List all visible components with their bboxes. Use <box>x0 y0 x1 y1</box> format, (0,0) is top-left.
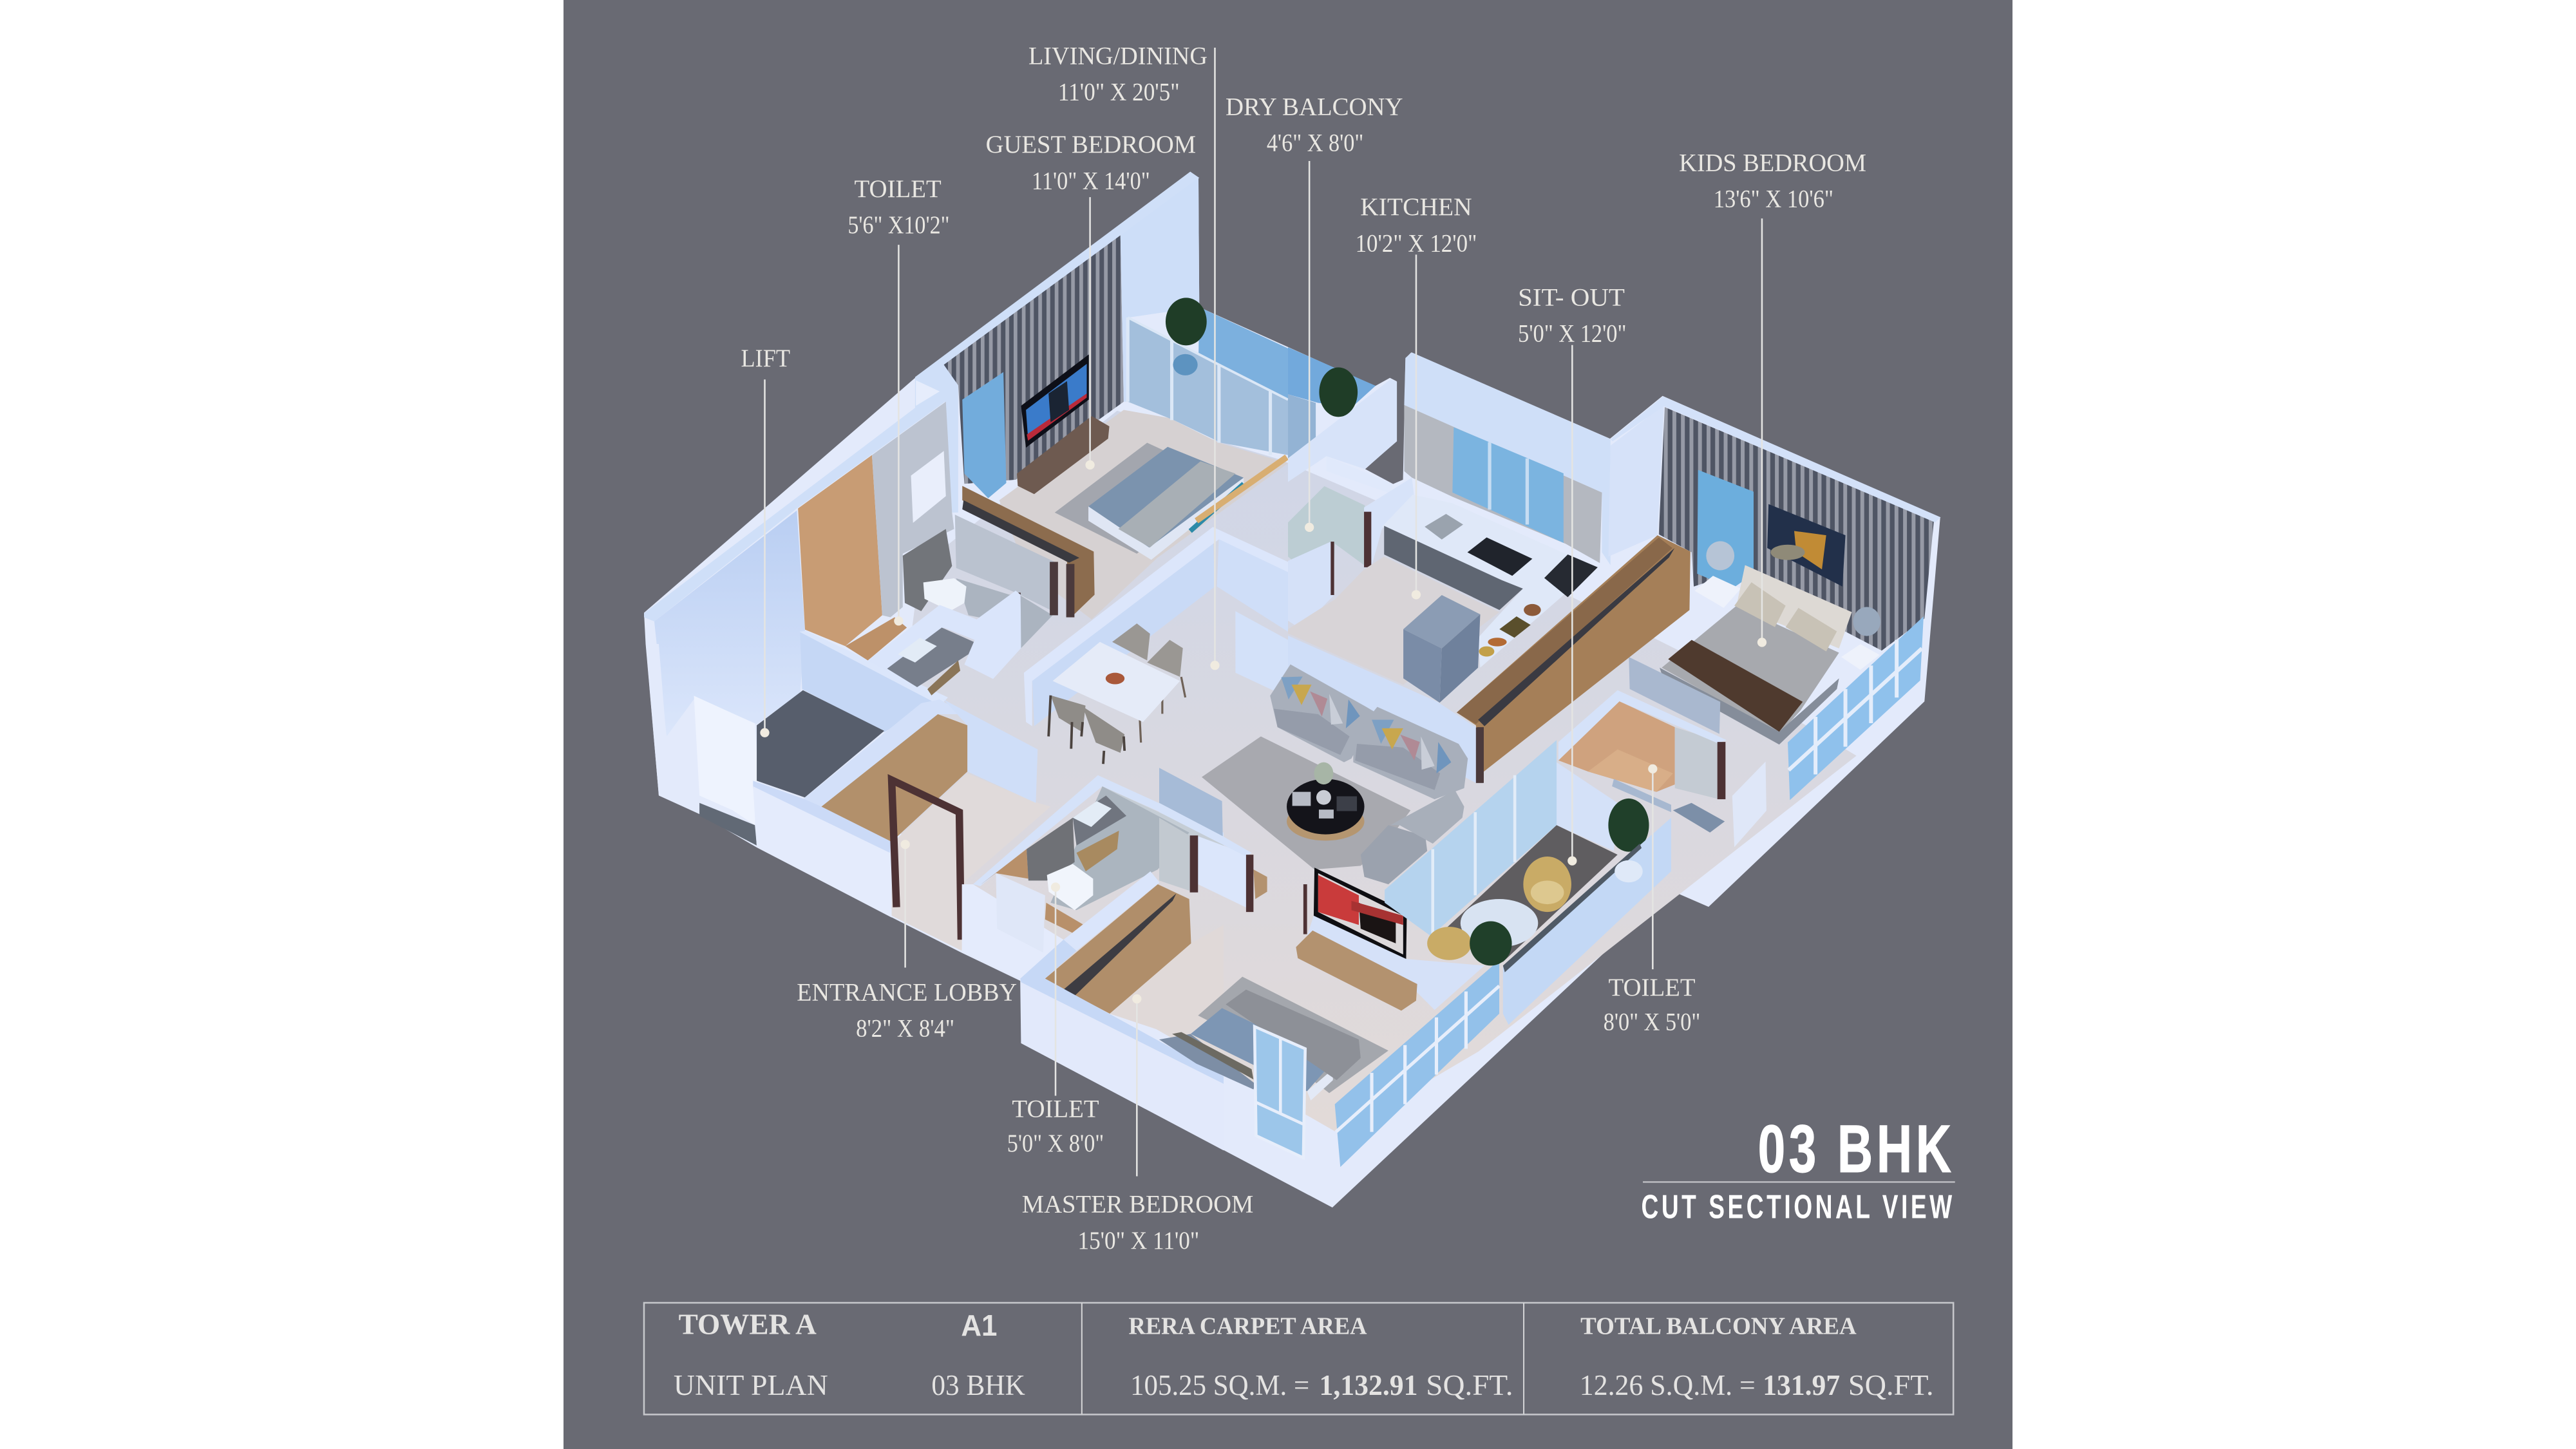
area table: TOTAL BALCONY AREA <box>1580 1312 1857 1340</box>
food on counter <box>1479 604 1541 656</box>
toilet floor <box>1050 786 1189 910</box>
master glazing <box>1335 960 1499 1167</box>
label: entrance lobby: 8'2" X 8'4" <box>856 1014 954 1043</box>
wood panel <box>822 714 967 842</box>
cabinets <box>1384 526 1523 610</box>
plant <box>1166 298 1207 375</box>
label: master bedroom: MASTER BEDROOM <box>1022 1190 1253 1218</box>
area table: 131.97 <box>1763 1368 1840 1401</box>
label: kitchen <box>1356 193 1477 600</box>
balcony blue <box>1288 347 1376 407</box>
master bench <box>1296 931 1417 1010</box>
area table: A1 <box>961 1309 997 1342</box>
guest wardrobe <box>962 486 1095 618</box>
sofa 1 <box>1270 665 1376 762</box>
marble wall <box>872 402 954 618</box>
posts <box>1190 835 1307 934</box>
upper-left rooms <box>644 172 1288 764</box>
wc <box>1047 864 1093 910</box>
kids stripe wall <box>1659 407 1934 650</box>
coffee table <box>1287 762 1365 840</box>
label: toilet <box>848 175 949 625</box>
master rug <box>1198 977 1388 1093</box>
label: master bedroom <box>1022 994 1253 1255</box>
master bed <box>1159 990 1361 1101</box>
notch face <box>916 381 940 406</box>
wood tall panel <box>798 455 882 646</box>
vanity <box>1073 795 1126 871</box>
nightstands and lamps <box>1694 541 1880 670</box>
lower-left rooms <box>646 644 1224 1150</box>
label: living dining: LIVING/DINING <box>1028 41 1208 70</box>
right toilet <box>1477 690 1727 833</box>
small chair <box>1427 927 1472 960</box>
label: guest bedroom: GUEST BEDROOM <box>986 130 1196 158</box>
partition wall behind sofas <box>1288 636 1476 783</box>
louvre vent <box>911 451 946 523</box>
post <box>1190 836 1198 892</box>
front wall with louvre <box>962 873 1063 978</box>
label: dry balcony: DRY BALCONY <box>1226 93 1403 121</box>
label: kitchen: 10'2" X 12'0" <box>1356 229 1477 257</box>
balcony water blue <box>1198 307 1288 410</box>
lift wall band <box>799 631 948 706</box>
living, sit-out and master <box>1159 665 1727 1167</box>
label: entrance lobby <box>797 840 1017 1043</box>
counter top <box>1382 495 1596 668</box>
kitchen and kids rooms <box>1288 347 1940 847</box>
kids balcony glazing <box>1788 616 1924 800</box>
kids wardrobe <box>1457 535 1690 783</box>
master exterior <box>1021 982 1224 1150</box>
guest rug <box>1055 443 1227 554</box>
toilet wall band <box>973 775 1224 886</box>
posts <box>1331 512 1371 595</box>
area table <box>644 1303 1953 1414</box>
area table: 1,132.91 <box>1319 1368 1418 1401</box>
label: guest bedroom <box>986 130 1196 469</box>
left end wall <box>646 644 699 814</box>
kitchen top wall <box>1404 352 1611 565</box>
kitchen floor <box>1288 556 1499 685</box>
label: living dining: 11'0" X 20'5" <box>1058 78 1180 106</box>
master floor <box>1110 925 1224 1050</box>
wall between kitchen and kids <box>1608 405 1664 556</box>
toilet marble back <box>1103 786 1224 873</box>
guest window <box>962 372 1006 498</box>
dry balcony block <box>1288 542 1334 629</box>
balcony side wall <box>1288 379 1397 482</box>
label: sit-out: 5'0" X 12'0" <box>1518 319 1627 348</box>
wall right of wood <box>943 699 1037 803</box>
wc wall <box>1027 818 1075 880</box>
area table: 12.26 S.Q.M. = <box>1580 1368 1756 1401</box>
white wall guest <box>1121 178 1199 402</box>
wood floor <box>845 618 907 661</box>
hob <box>1468 537 1532 576</box>
kids partition panel <box>1629 657 1720 734</box>
sit-out table <box>1461 899 1538 947</box>
WC <box>903 529 967 611</box>
label: sit-out <box>1518 283 1627 866</box>
wall between lift and lobby <box>803 699 965 807</box>
plant <box>1319 367 1358 417</box>
living partition box <box>1235 611 1288 697</box>
vanity <box>887 627 974 696</box>
label: kids bedroom: 13'6" X 10'6" <box>1714 184 1833 213</box>
toilet marble partition <box>955 515 1057 613</box>
label: living dining <box>1028 41 1220 670</box>
kids window <box>1697 470 1754 589</box>
label: toilet: 5'6" X10'2" <box>848 211 949 239</box>
label: kitchen: KITCHEN <box>1360 193 1472 221</box>
floor plan: isometric cut-away building <box>644 172 1940 1208</box>
title block: 03 BHK <box>1758 1112 1955 1187</box>
dining chairs lower <box>1048 677 1186 764</box>
toilet front wall <box>1063 871 1160 951</box>
louvre rails <box>1327 456 1392 493</box>
door posts <box>1017 562 1074 648</box>
area table: SQ.FT. <box>1848 1368 1934 1401</box>
kids bed <box>1660 565 1852 744</box>
divider <box>1159 768 1223 836</box>
master TV <box>1314 867 1407 959</box>
master door glass <box>1255 1027 1305 1158</box>
interior floor <box>887 411 1857 1133</box>
wall left of counter <box>1364 478 1414 567</box>
white vanity wall <box>868 591 1021 679</box>
lift floor <box>757 690 884 797</box>
building silhouette <box>644 172 1940 1208</box>
left wall inner face <box>654 511 805 736</box>
lobby front wall band <box>753 781 892 853</box>
guest floor <box>999 410 1288 620</box>
label: entrance lobby: ENTRANCE LOBBY <box>797 978 1017 1007</box>
dining table <box>1053 642 1180 722</box>
label: lower toilet: TOILET <box>1012 1095 1099 1123</box>
label: right toilet: 8'0" X 5'0" <box>1604 1007 1700 1036</box>
kids wall top band <box>1611 397 1940 522</box>
guest stripe wall <box>944 235 1124 484</box>
sofa 2 <box>1353 707 1468 799</box>
balcony glass <box>1288 394 1316 459</box>
label: lower toilet <box>1007 882 1104 1157</box>
label: lift <box>741 344 790 737</box>
lobby front wall <box>753 786 892 918</box>
kitchen window <box>1452 427 1564 543</box>
long partition wall <box>1024 527 1288 726</box>
threshold <box>699 803 757 846</box>
right louvre <box>1732 762 1766 847</box>
label: kids bedroom <box>1679 148 1866 647</box>
area table: SQ.FT. <box>1426 1368 1513 1401</box>
label: lift: LIFT <box>741 344 790 372</box>
area table: TOWER A <box>679 1307 817 1340</box>
lift door <box>694 696 759 825</box>
lobby floor <box>892 773 1050 951</box>
divider base wall <box>1159 803 1267 910</box>
chair <box>1523 857 1571 912</box>
label: guest bedroom: 11'0" X 14'0" <box>1032 166 1150 194</box>
armchairs <box>1361 790 1464 884</box>
sink <box>1425 514 1463 540</box>
area table: 105.25 SQ.M. = <box>1130 1368 1309 1401</box>
toilet floor <box>956 578 1053 648</box>
plants <box>1470 799 1649 965</box>
master wall band <box>1020 940 1224 1084</box>
fridge <box>1403 595 1480 703</box>
area table: RERA CARPET AREA <box>1129 1312 1367 1340</box>
master wall under TV <box>1307 916 1484 1010</box>
label: right toilet: TOILET <box>1608 973 1696 1001</box>
area table: UNIT PLAN <box>674 1368 828 1401</box>
wall behind lift <box>800 632 940 732</box>
guest bed <box>1088 447 1287 560</box>
sit-out floor <box>1446 825 1618 962</box>
label: right toilet <box>1604 764 1700 1036</box>
balcony railing <box>1503 818 1671 1025</box>
label: kids bedroom: KIDS BEDROOM <box>1679 148 1866 176</box>
guest TV <box>1021 354 1089 448</box>
panel: background <box>564 0 2012 1449</box>
wall behind sit-out <box>1557 762 1618 851</box>
master wardrobe <box>1045 884 1191 1014</box>
oven <box>1544 554 1598 597</box>
label: dry balcony <box>1226 93 1403 532</box>
title block <box>1641 1112 1955 1226</box>
dining chairs upper <box>1112 623 1183 677</box>
area table: 03 BHK <box>931 1368 1025 1401</box>
label: sit-out: SIT- OUT <box>1518 283 1625 311</box>
kids picture <box>1767 504 1846 587</box>
glass doors <box>1128 317 1288 455</box>
guest bench <box>1017 416 1110 494</box>
wall top band left and guest <box>644 172 1199 621</box>
wood inset <box>981 849 1084 933</box>
label: dry balcony: 4'6" X 8'0" <box>1267 129 1363 157</box>
rug <box>1202 736 1410 869</box>
label: master bedroom: 15'0" X 11'0" <box>1077 1226 1199 1255</box>
label: toilet: TOILET <box>855 175 942 203</box>
label: lower toilet: 5'0" X 8'0" <box>1007 1129 1104 1157</box>
dry balcony floor <box>1288 486 1365 595</box>
kitchen marble wall <box>1404 405 1602 563</box>
sit-out glass <box>1385 740 1557 936</box>
lobby door frame <box>892 780 961 940</box>
title block: CUT SECTIONAL VIEW <box>1641 1189 1955 1226</box>
